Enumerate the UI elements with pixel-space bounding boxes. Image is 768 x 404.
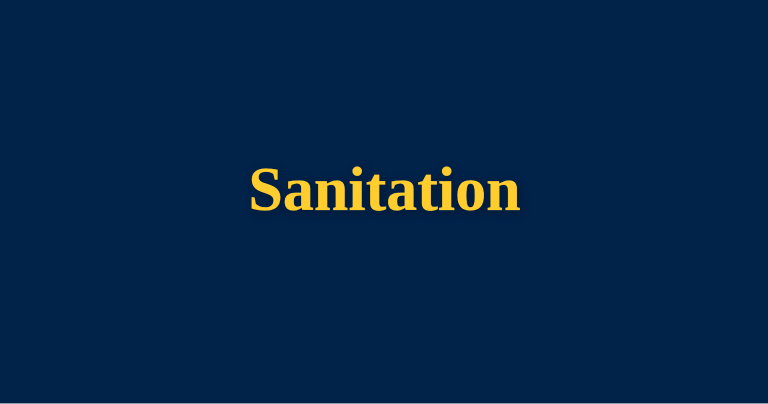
title: Sanitation bbox=[248, 156, 521, 224]
